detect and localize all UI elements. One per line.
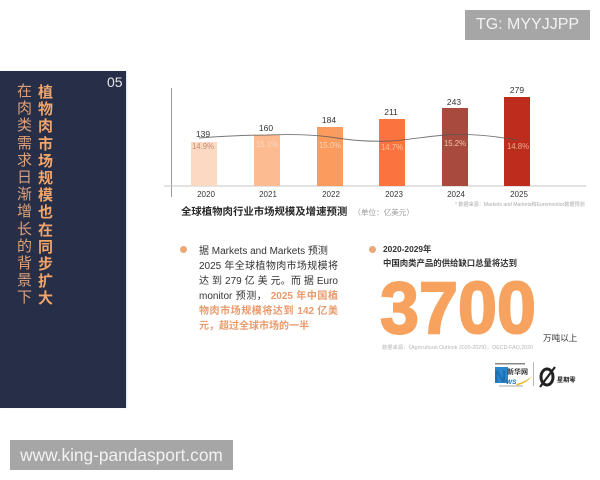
text block: supply gap heading: 2020-2029年 bbox=[383, 244, 431, 254]
watermark: website label bbox=[10, 440, 233, 470]
page number: 05 bbox=[107, 74, 123, 90]
text block: market forecast: 2025 年全球植物肉市场规模将 bbox=[199, 261, 338, 272]
growth rate labels: 14.7% bbox=[381, 143, 403, 152]
year labels: 2023 bbox=[385, 190, 403, 199]
growth rate labels: 14.9% bbox=[192, 142, 214, 151]
year labels bbox=[197, 190, 528, 199]
value labels: 184 bbox=[322, 115, 336, 125]
bars bbox=[191, 97, 530, 186]
value labels: 139 bbox=[196, 129, 210, 139]
bullet: right column bbox=[369, 246, 376, 253]
chart title: 全球植物肉行业市场规模及增速预测 （单位：亿美元） bbox=[181, 207, 414, 218]
watermark: website label: www.king-pandasport.com bbox=[20, 445, 223, 465]
logo: Xinhua News: 新华网 bbox=[507, 367, 528, 376]
year labels: 2021 bbox=[259, 190, 277, 199]
growth rate labels: 14.8% bbox=[507, 142, 529, 151]
growth rate labels bbox=[192, 139, 529, 152]
logos: Xinhua and weekly bbox=[494, 362, 576, 388]
watermark: TG label: TG: MYYJJPP bbox=[476, 16, 579, 33]
text block: market forecast: 据 Markets and Markets 预测 bbox=[199, 246, 328, 257]
year labels: 2025 bbox=[510, 190, 528, 199]
panel: left title sidebar bbox=[0, 71, 126, 408]
value labels bbox=[196, 85, 524, 139]
text block: market forecast: 物肉市场规模将达到 142 亿美 bbox=[199, 306, 338, 317]
text block: market forecast bbox=[199, 245, 338, 332]
text block: supply gap heading bbox=[383, 244, 517, 268]
growth trend line bbox=[199, 134, 517, 141]
source note: * 数据来源：Markets and Markets和Euromonitor数据预测 bbox=[455, 201, 585, 208]
value labels: 243 bbox=[447, 97, 461, 107]
value labels: 211 bbox=[384, 107, 398, 117]
year labels: 2024 bbox=[447, 190, 465, 199]
bullet: left column bbox=[180, 246, 187, 253]
value labels: 160 bbox=[259, 123, 273, 133]
logo: Xinhua News bbox=[494, 363, 532, 386]
source note: 数据来源：《Agricultural Outlook 2020-2029》，OECD-FAO,2020 bbox=[382, 345, 533, 351]
value labels: 279 bbox=[510, 85, 524, 95]
year labels: 2022 bbox=[322, 190, 340, 199]
heading: bold vertical title: 植物肉市场规模也在同步扩大 bbox=[38, 84, 53, 307]
growth rate labels: 15.0% bbox=[319, 141, 341, 150]
text block: market forecast: 达 到 279 亿 美 元。而 据 Euro bbox=[199, 276, 338, 287]
bar chart: global plant-based meat market bbox=[164, 85, 586, 208]
logo: weekly: 星期零 bbox=[557, 376, 576, 384]
logo: Xinhua News: WS bbox=[506, 379, 517, 386]
watermark: TG label bbox=[465, 10, 590, 40]
unit label: 万吨以上 bbox=[543, 333, 577, 343]
logo: Xinhua News: N bbox=[494, 367, 506, 386]
text block: market forecast: monitor 预测， 2025 年中国植 bbox=[199, 291, 338, 302]
text block: supply gap heading: 中国肉类产品的供给缺口总量将达到 bbox=[383, 258, 517, 268]
year labels: 2020 bbox=[197, 190, 215, 199]
heading: vertical subtitle: 在肉类需求日渐增长的背景下 bbox=[17, 83, 32, 306]
growth rate labels: 15.1% bbox=[256, 140, 278, 149]
text block: market forecast: 元，超过全球市场的一半 bbox=[199, 321, 309, 332]
growth rate labels: 15.2% bbox=[444, 139, 466, 148]
